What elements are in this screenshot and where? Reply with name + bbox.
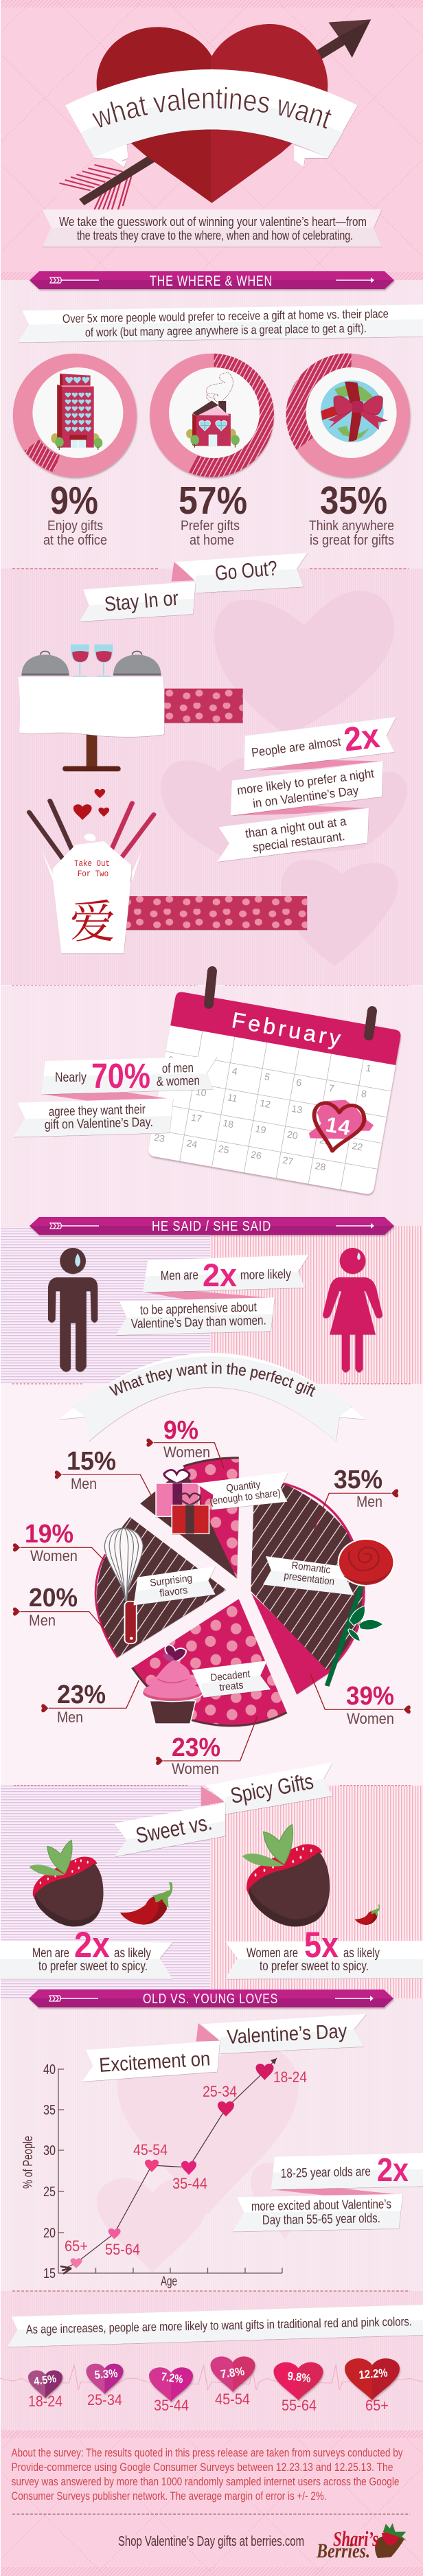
stat: 9%	[43, 479, 107, 548]
data labels: 25-34	[203, 2083, 237, 2100]
stat: 39% women: 39%	[346, 1682, 394, 1711]
icon: office building	[51, 374, 102, 450]
panel: header	[1, 0, 423, 280]
logo	[316, 2523, 407, 2562]
callout ribbons: men 2x: more likely	[240, 1267, 292, 1283]
stat: 9%: at the office	[43, 533, 107, 548]
dates: 5	[264, 1071, 271, 1082]
callout: women 5x	[225, 1925, 423, 1979]
heart: 25-34: 5.3%	[94, 2367, 118, 2382]
heart: 35-44: 7.2%	[160, 2370, 184, 2386]
callout ribbons: 2x: more likely to prefer a night	[236, 766, 375, 797]
dates	[153, 1028, 378, 1178]
icon: house	[186, 373, 240, 448]
callout: women 5x: Women are	[247, 1946, 298, 1961]
illustration: take out box	[29, 789, 307, 953]
heading: stay in or: Stay In or	[104, 587, 179, 616]
illustration: women strawberry and pepper	[242, 1825, 380, 1926]
dates: 6	[295, 1076, 303, 1088]
dates: 7	[328, 1082, 335, 1094]
stat: 35% men: Men	[356, 1493, 382, 1510]
binder rings	[209, 971, 372, 1036]
callout ribbons: men 2x: 2x	[203, 1257, 237, 1293]
stat: 19% women: 19%	[25, 1520, 73, 1549]
heart	[97, 24, 328, 203]
axis values: 30	[43, 2143, 56, 2158]
stat: 35%	[309, 479, 394, 548]
label ribbon: decadent treats	[192, 1661, 271, 1698]
icon: gift-wrapped globe	[321, 380, 388, 442]
section banner: OLD VS. YOUNG LOVES	[143, 1992, 278, 2007]
panel: colors by age	[0, 2291, 423, 2430]
dates: 15	[356, 1115, 368, 1127]
statement ribbon: of work (but many agree anywhere is a great place to get a gift).	[85, 321, 367, 339]
stat: 20% men: Men	[29, 1612, 56, 1629]
wedge: surprising flavors	[95, 1517, 226, 1657]
dates: 24	[185, 1137, 198, 1150]
panel: old vs young	[1, 1990, 423, 2291]
stat: 9% women: 9%	[163, 1416, 198, 1445]
dates: 3	[199, 1060, 207, 1071]
label ribbon: decadent treats: treats	[219, 1679, 244, 1694]
shop link: Shop Valentine’s Day gifts at berries.com	[118, 2534, 304, 2549]
panel: footer	[1, 2430, 423, 2576]
stat: 20% men	[29, 1584, 78, 1629]
stat: 9% women: Women	[163, 1444, 210, 1461]
dates: 28	[315, 1160, 327, 1173]
donut: office 9%	[13, 354, 137, 477]
icon: cupcake	[142, 1645, 203, 1724]
stat: 57%: at home	[190, 533, 234, 548]
callout: men 2x	[0, 1925, 172, 1979]
panel: sweet vs spicy	[0, 1763, 423, 1998]
stat: 23% women: Women	[172, 1760, 219, 1777]
icon: circled 14 heart: 14	[324, 1112, 353, 1140]
title ribbon	[65, 69, 358, 168]
label ribbon: romantic presentation: Romantic	[291, 1560, 332, 1576]
callout ribbons: 70%: of men	[162, 1061, 194, 1076]
stat: 23% men	[57, 1680, 106, 1726]
section banner: THE WHERE & WHEN	[150, 273, 273, 289]
stat: 35%: Think anywhere	[309, 518, 394, 534]
background hearts	[97, 2044, 319, 2273]
heart: 65+: 12.2%	[358, 2366, 388, 2382]
dates: 17	[190, 1112, 203, 1124]
stat: 23% men: Men	[57, 1709, 83, 1726]
stat: 39% women: Women	[347, 1710, 394, 1727]
heart: 35-44	[149, 2367, 193, 2402]
callout ribbons: men 2x: Valentine’s Day than women.	[131, 1314, 266, 1332]
dates: 1	[365, 1062, 372, 1074]
survey note	[11, 2447, 403, 2503]
heading: sweet vs: Sweet vs.	[134, 1810, 214, 1848]
intro ribbon: We take the guesswork out of winning your valentine’s heart—from	[59, 215, 367, 229]
axis values: 40	[43, 2062, 56, 2077]
callout: women 5x: to prefer sweet to spicy.	[260, 1959, 369, 1974]
label ribbon: surprising flavors: flavors	[159, 1584, 188, 1599]
label ribbon: surprising flavors	[133, 1566, 216, 1605]
callout ribbons: men 2x: to be apprehensive about	[140, 1300, 258, 1318]
callout ribbons: 2x: People are almost	[251, 735, 341, 760]
callout ribbons: 70%: gift on Valentine’s Day.	[45, 1115, 153, 1132]
axis values: 20	[43, 2226, 56, 2241]
callout ribbons: 70%: Nearly	[55, 1071, 87, 1085]
illustration: men strawberry and pepper	[29, 1840, 172, 1926]
dates: 22	[351, 1140, 364, 1152]
callout ribbons: 2x: in on Valentine’s Day	[252, 784, 359, 810]
age labels: 45-54	[215, 2391, 250, 2408]
axis values: 15	[43, 2266, 56, 2281]
donut: home 57%	[150, 354, 274, 477]
stat: 35% men	[334, 1466, 382, 1510]
icon: gifts	[156, 1470, 209, 1534]
axis values: 35	[43, 2103, 56, 2118]
dates: 18	[222, 1117, 235, 1130]
data labels: 35-44	[172, 2175, 207, 2192]
callout ribbons: 18-25 2x: Day than 55-65 year olds.	[262, 2211, 380, 2228]
stat: 57%	[179, 479, 247, 548]
dates: 19	[255, 1123, 267, 1136]
label ribbon: quantity	[196, 1472, 288, 1509]
data labels: 45-54	[133, 2141, 168, 2158]
wedge: romantic presentation	[251, 1483, 364, 1694]
icon: whisk	[104, 1528, 143, 1643]
stat: 15% men: 15%	[67, 1447, 116, 1476]
stat: 9% women	[163, 1416, 210, 1461]
heading ribbons	[80, 553, 308, 622]
callout: men 2x: 2x	[74, 1925, 110, 1965]
heading: go out: Go Out?	[214, 557, 278, 585]
heading ribbons	[82, 2014, 367, 2082]
dates: 12	[259, 1097, 272, 1110]
survey note: Consumer Surveys publisher network. The average margin of error is +/- 2%.	[11, 2490, 327, 2503]
data hearts	[70, 2064, 273, 2268]
heart: 55-64	[273, 2362, 323, 2400]
panel: perfect gift	[1, 1353, 423, 1786]
callout ribbons: men 2x: Men are	[161, 1268, 198, 1284]
label ribbon: quantity: (enough to share)	[209, 1487, 282, 1507]
stat: 9%: 9%	[50, 479, 98, 523]
panel: stay in or go out	[1, 553, 423, 985]
data labels	[65, 2068, 307, 2258]
heart: 45-54	[210, 2356, 255, 2392]
statement ribbon	[18, 304, 423, 342]
intro ribbon: the treats they crave to the where, when and how of celebrating.	[77, 229, 353, 242]
wedge: decadent treats	[133, 1599, 287, 1726]
dates: 27	[282, 1154, 295, 1167]
heading: excitement on: Excitement on	[98, 2048, 211, 2077]
callout ribbons: 2x: 2x	[342, 718, 382, 759]
intro ribbon	[43, 209, 382, 247]
line chart	[21, 2058, 307, 2289]
age labels: 65+	[365, 2397, 389, 2414]
callout ribbons: 2x	[217, 717, 396, 862]
callout ribbons: men 2x	[116, 1255, 309, 1335]
arc ribbon heading: What they want in the perfect gift	[108, 1362, 316, 1397]
section banner	[29, 1990, 393, 2007]
callout ribbons: 70%: agree they want their	[49, 1102, 146, 1119]
dates: 8	[361, 1088, 367, 1099]
dates: 16	[158, 1106, 170, 1119]
callout: women 5x: as likely	[343, 1946, 380, 1961]
heart: 65+	[345, 2358, 400, 2400]
axis values: 25	[43, 2185, 56, 2200]
label ribbon: quantity: Quantity	[225, 1479, 262, 1494]
callout ribbons: 2x: special restaurant.	[252, 829, 345, 854]
label ribbon: decadent treats: Decadent	[210, 1668, 251, 1684]
stat: 57%: Prefer gifts	[181, 518, 240, 534]
dates: 26	[250, 1149, 262, 1161]
section banner	[30, 1217, 394, 1235]
data labels: 65+	[65, 2237, 88, 2255]
stat: 35% men: 35%	[334, 1466, 382, 1494]
dates: 25	[218, 1143, 230, 1156]
arc ribbon heading	[60, 1353, 365, 1442]
section banner	[30, 271, 394, 289]
stat: 35%: 35%	[320, 479, 387, 523]
callout ribbons: 18-25 2x	[233, 2152, 423, 2231]
age labels: 25-34	[87, 2391, 122, 2408]
age labels	[28, 2391, 389, 2414]
icon: circled 14 heart	[309, 1100, 374, 1151]
icon: man with tear	[48, 1248, 98, 1372]
callout ribbons: 70%: & women	[157, 1074, 200, 1089]
age labels: 55-64	[282, 2397, 317, 2414]
dates: 23	[153, 1132, 166, 1144]
calendar	[148, 991, 402, 1195]
heading: spicy gifts: Spicy Gifts	[229, 1768, 315, 1808]
logo: Shari’s	[333, 2527, 378, 2551]
callout: men 2x: Men are	[32, 1946, 69, 1961]
dates: 21	[319, 1135, 332, 1147]
callout ribbons: 70%	[14, 1056, 217, 1137]
label ribbon: romantic presentation: presentation	[284, 1570, 335, 1588]
stat: 23% women	[172, 1733, 220, 1777]
stat: 23% men: 23%	[57, 1680, 106, 1709]
box character: love: 爱	[70, 885, 115, 950]
statement ribbon	[8, 2305, 423, 2347]
month: February	[230, 1007, 343, 1051]
arrow through heart	[59, 19, 371, 209]
leader lines	[13, 1439, 411, 1765]
callout ribbons: 18-25 2x: 18-25 year olds are	[281, 2165, 371, 2181]
age labels: 18-24	[28, 2393, 62, 2410]
stat: 9%: Enjoy gifts	[47, 518, 103, 534]
dates: 10	[195, 1086, 207, 1099]
line chart: % of People	[21, 2136, 36, 2189]
dates: 11	[227, 1091, 238, 1104]
panel: he said she said	[1, 1217, 423, 1384]
dates: 4	[231, 1065, 238, 1077]
heart: 55-64: 9.8%	[287, 2369, 312, 2385]
heart: 18-24	[28, 2370, 62, 2398]
stat: 57%: 57%	[179, 479, 247, 523]
dates: 13	[291, 1103, 304, 1115]
heart: 18-24: 4.5%	[33, 2373, 57, 2388]
stat: 39% women	[346, 1682, 394, 1727]
wedge: quantity	[140, 1458, 239, 1578]
label ribbon: surprising flavors: Surprising	[149, 1573, 193, 1589]
box label: Take Out	[74, 858, 110, 869]
callout ribbons: 2x: than a night out at a	[244, 814, 347, 841]
age labels: 35-44	[154, 2397, 189, 2414]
heading: valentine's day: Valentine’s Day	[227, 2020, 348, 2049]
axis values	[43, 2062, 56, 2281]
stat: 15% men: Men	[71, 1475, 97, 1492]
stat: 35%: is great for gifts	[310, 533, 394, 548]
section banner: HE SAID / SHE SAID	[152, 1219, 271, 1234]
donut: anywhere 35%	[286, 354, 410, 477]
illustration: dinner table	[19, 644, 243, 771]
panel: the where and when	[1, 271, 423, 569]
background hearts	[161, 591, 407, 966]
stat: 23% women: 23%	[172, 1733, 220, 1762]
line chart: Age	[161, 2275, 177, 2289]
icon: rose	[327, 1539, 394, 1686]
heartbeat line	[0, 2364, 423, 2390]
data labels: 55-64	[105, 2241, 140, 2258]
data labels: 18-24	[273, 2068, 307, 2086]
dates: 2	[167, 1053, 174, 1066]
icon: woman	[323, 1248, 382, 1372]
stat: 15% men	[67, 1447, 116, 1492]
heart: 25-34	[87, 2364, 124, 2394]
heart: 45-54: 7.8%	[220, 2364, 245, 2381]
callout: women 5x: 5x	[304, 1925, 339, 1965]
heading ribbons	[114, 1763, 332, 1856]
callout: men 2x: as likely	[114, 1946, 151, 1961]
dates: 20	[286, 1128, 299, 1141]
label ribbon: romantic presentation	[263, 1556, 354, 1595]
stat: 19% women: Women	[30, 1547, 78, 1564]
dates: 9	[162, 1080, 170, 1092]
stat: 20% men: 20%	[29, 1584, 78, 1612]
stat: 19% women	[25, 1520, 78, 1564]
illustration: take out box: For Two	[78, 869, 108, 879]
callout: men 2x: to prefer sweet to spicy.	[38, 1959, 148, 1974]
pie chart	[95, 1458, 394, 1726]
logo: Berries.	[316, 2540, 370, 2562]
title: what valentines want	[92, 87, 332, 129]
callout ribbons: 70%: 70%	[91, 1056, 150, 1095]
callout ribbons: 18-25 2x: 2x	[377, 2152, 409, 2189]
panel: february	[1, 971, 423, 1226]
